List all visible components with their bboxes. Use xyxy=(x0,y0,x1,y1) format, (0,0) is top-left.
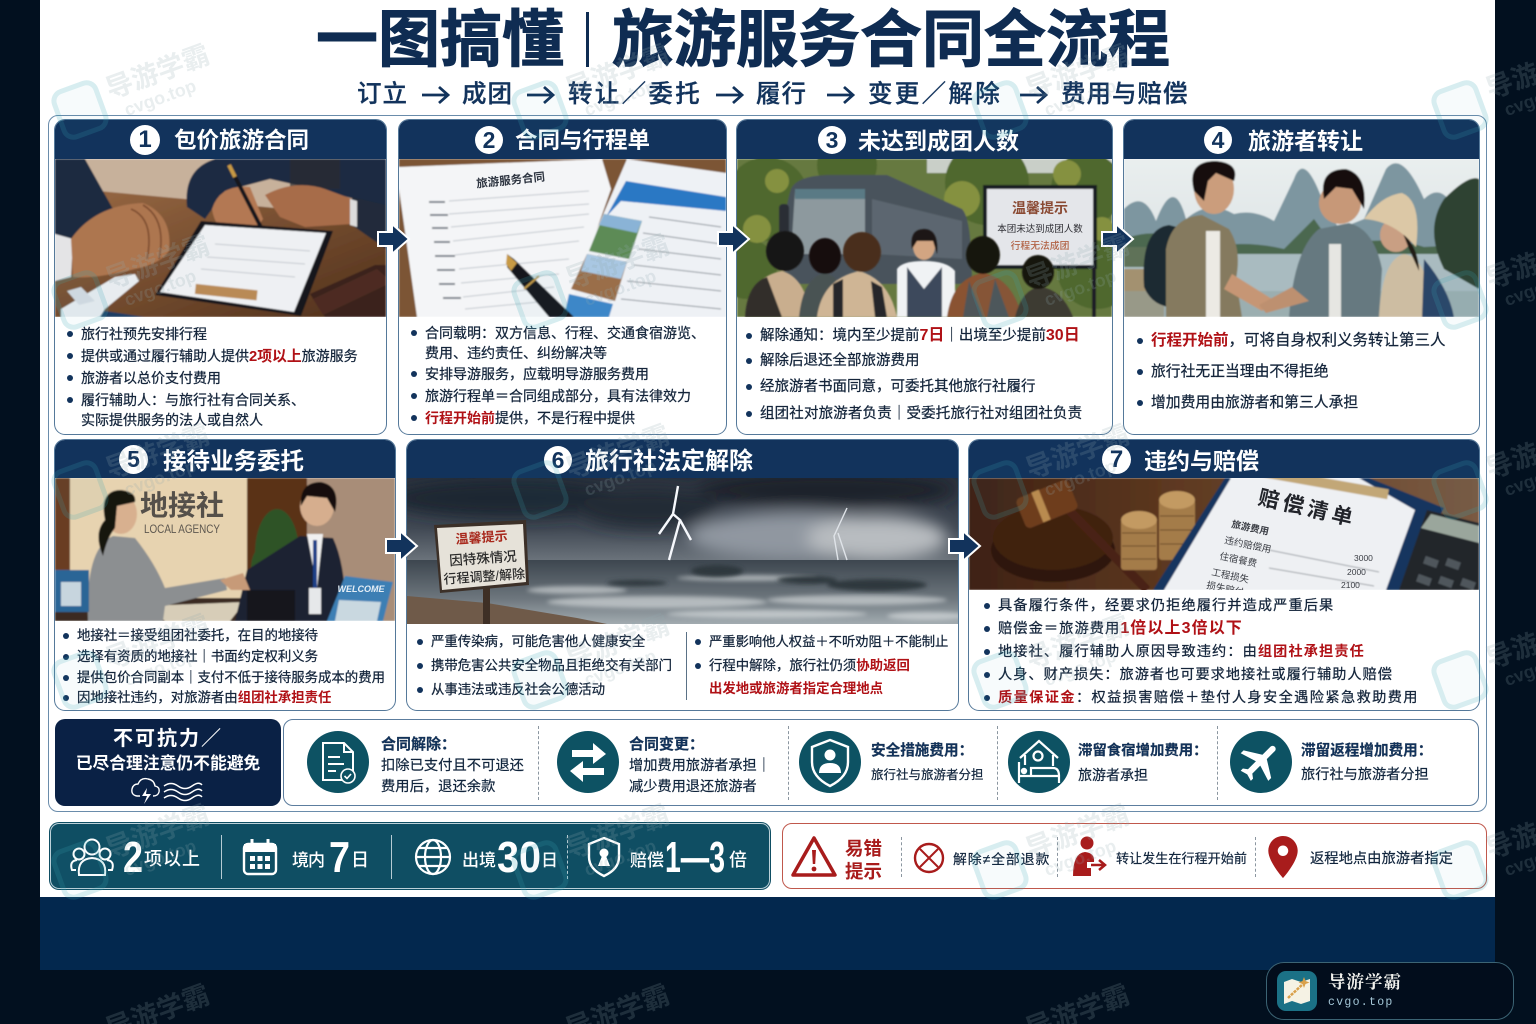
photo: gavel, coins and compensation list: 3000 xyxy=(1354,553,1373,563)
stranded return item: 旅行社与旅游者分担 xyxy=(1301,767,1429,783)
title: 旅游服务合同全流程 xyxy=(612,6,1170,75)
photo: gavel, coins and compensation list: 旅游费用 xyxy=(1230,518,1270,538)
photo: gavel, coins and compensation list: 2100 xyxy=(1341,580,1360,590)
common mistakes box: 解除≠全部退款 xyxy=(953,851,1050,867)
watermark layer: cvgo.top xyxy=(122,836,199,880)
watermark layer: cvgo.top xyxy=(122,646,199,690)
watermark layer: 导游学霸 xyxy=(1022,800,1134,865)
watermark layer: 导游学霸 xyxy=(1022,40,1134,105)
watermark layer: 导游学霸 xyxy=(102,40,214,105)
icon: location pin xyxy=(1268,836,1298,878)
stat: outbound 30 days: 出境 xyxy=(462,851,496,870)
panel 7: breach and compensation: 违约与赔偿 xyxy=(1144,448,1259,474)
photo: guide notifying group by a bus xyxy=(737,159,1112,317)
photo: gavel, coins and compensation list: 赔偿清单 xyxy=(1256,486,1359,531)
watermark layer: cvgo.top xyxy=(582,646,659,690)
subtitle: process flow: 变更／解除 xyxy=(868,81,1002,108)
panel 2: contract and itinerary: 安排导游服务，应载明导游服务费用 xyxy=(425,366,649,382)
common mistakes box: 易错 xyxy=(845,838,882,859)
stat: compensation 1-3 times: 倍 xyxy=(729,850,747,870)
contract termination item xyxy=(307,731,524,795)
stat: outbound 30 days: 日 xyxy=(541,851,558,870)
panel 6: statutory termination by agency: 行程中解除，旅行社仍须协助返回 xyxy=(709,658,910,673)
photo: gavel, coins and compensation list: 违约赔偿用 xyxy=(1223,534,1272,556)
safety cost item: 安全措施费用： xyxy=(871,743,973,759)
brand badge: cvgo.top xyxy=(1328,996,1394,1009)
safety cost item: 旅行社与旅游者分担 xyxy=(871,768,984,782)
arrow: panel 1 to 2 xyxy=(377,226,410,252)
stat: compensation 1-3 times xyxy=(630,834,747,880)
panel 2: contract and itinerary xyxy=(399,120,726,434)
common mistakes box xyxy=(782,823,1487,889)
icon: calendar xyxy=(242,839,278,876)
arrow: panel 6 to 7 xyxy=(948,533,982,559)
force majeure box: 已尽合理注意仍不能避免 xyxy=(76,754,260,773)
subtitle: process flow: 订立 xyxy=(357,81,408,108)
photo: local agency reception handshake: 地接社 xyxy=(140,490,224,521)
stat: domestic 7 days xyxy=(292,834,369,880)
panel 7: breach and compensation: 7 xyxy=(1110,446,1123,473)
panel 1: package tour contract: 旅游者以总价支付费用 xyxy=(81,370,221,386)
watermark layer: 导游学霸 xyxy=(1022,610,1134,675)
panel 3: minimum group size not met xyxy=(737,120,1112,434)
panel 7: breach and compensation: 地接社、履行辅助人原因导致违约：由组团社承担责任 xyxy=(998,644,1365,660)
panel 2: contract and itinerary: 旅游行程单＝合同组成部分，具有法律效力 xyxy=(425,388,691,404)
photo: guide notifying group by a bus: 本团未达到成团人数 xyxy=(997,223,1083,235)
contract change item xyxy=(557,731,771,795)
watermark layer: cvgo.top xyxy=(582,456,659,500)
force majeure box xyxy=(55,719,281,806)
panel 6: statutory termination by agency: 6 xyxy=(552,447,564,473)
photo: gavel, coins and compensation list xyxy=(969,478,1479,590)
watermark layer: cvgo.top xyxy=(122,456,199,500)
panel 5: local agency entrustment: 提供包价合同副本｜支付不低于接待服务成本的费用 xyxy=(77,670,385,685)
contract change item: 合同变更： xyxy=(629,736,704,753)
subtitle: process flow: 费用与赔偿 xyxy=(1061,81,1188,108)
icon: storm and waves xyxy=(131,778,202,804)
stat: outbound 30 days xyxy=(462,834,558,880)
panel 4: traveler transfer: 旅游者转让 xyxy=(1248,128,1363,154)
photo: gavel, coins and compensation list: 工程损失 xyxy=(1210,566,1251,586)
photo: gavel, coins and compensation list: 2000 xyxy=(1347,567,1366,577)
panel 4: traveler transfer xyxy=(1124,120,1479,434)
panel 7: breach and compensation: 人身、财产损失：旅游者也可要求地接社或履行辅助人赔偿 xyxy=(998,667,1393,683)
panel 2: contract and itinerary: 合同与行程单 xyxy=(515,128,650,153)
watermark layer: 导游学霸 xyxy=(562,230,674,295)
arrow: panel 5 to 6 xyxy=(385,533,418,559)
photo: local agency reception handshake: WELCOME xyxy=(338,584,385,594)
stranded lodging item: 滞留食宿增加费用： xyxy=(1078,743,1208,759)
photo: gavel, coins and compensation list: 住宿餐费 xyxy=(1218,550,1258,570)
stranded lodging item xyxy=(1008,731,1208,793)
panel 1: package tour contract: 实际提供服务的法人或自然人 xyxy=(81,412,263,428)
panel 1: package tour contract: 1 xyxy=(138,126,152,153)
panel 7: breach and compensation: 质量保证金：权益损害赔偿＋垫付人身安全遇险紧急救助费用 xyxy=(998,690,1419,706)
panel 7: breach and compensation xyxy=(969,440,1479,710)
watermark layer: 导游学霸 xyxy=(102,800,214,865)
panel 7: breach and compensation: 具备履行条件，经要求仍拒绝履行并造成严重后果 xyxy=(998,598,1334,614)
icon: exchange arrows xyxy=(557,731,619,793)
panel 1: package tour contract: 提供或通过履行辅助人提供2项以上旅游服务 xyxy=(81,348,358,365)
watermark layer: cvgo.top xyxy=(582,76,659,120)
icon: shield xyxy=(588,836,620,878)
stat: compensation 1-3 times: 赔偿 xyxy=(630,851,664,870)
stranded lodging item: 旅游者承担 xyxy=(1078,767,1148,783)
panel 1: package tour contract xyxy=(55,120,386,434)
panel 2: contract and itinerary: 费用、违约责任、纠纷解决等 xyxy=(425,345,607,361)
photo: signing a contract xyxy=(55,159,386,317)
arrow: panel 2 to 3 xyxy=(717,226,750,252)
subtitle: process flow: 转让／委托 xyxy=(568,81,702,108)
panel 4: traveler transfer: 增加费用由旅游者和第三人承担 xyxy=(1151,395,1358,411)
watermark layer: 导游学霸 xyxy=(562,610,674,675)
watermark layer: 导游学霸 xyxy=(562,800,674,865)
stat: domestic 7 days: 日 xyxy=(351,850,369,870)
photo: travelers shaking hands before karst hills xyxy=(1124,159,1479,317)
force majeure box: 不可抗力／ xyxy=(113,728,223,750)
panel 1: package tour contract: 旅行社预先安排行程 xyxy=(81,326,207,342)
common mistakes box: 提示 xyxy=(845,861,882,882)
icon: document xyxy=(307,731,369,793)
photo: storm over the sea with a warning sign: 行程调整/解除 xyxy=(443,566,526,587)
panel 5: local agency entrustment: 因地接社违约，对旅游者由组团社承担责任 xyxy=(77,690,331,705)
watermark layer: cvgo.top xyxy=(122,76,199,120)
stranded return item: 滞留返程增加费用： xyxy=(1301,743,1432,759)
panel 3: minimum group size not met: 未达到成团人数 xyxy=(858,128,1019,154)
photo: storm over the sea with a warning sign xyxy=(407,478,958,624)
panel 6: statutory termination by agency: 严重传染病，可能危害他人健康安全 xyxy=(431,634,645,649)
icon: warning triangle xyxy=(791,836,837,877)
panel 1: package tour contract: 包价旅游合同 xyxy=(174,128,309,153)
watermark layer: 导游学霸 xyxy=(102,420,214,485)
panel 2: contract and itinerary: 合同载明：双方信息、行程、交通食宿游览、 xyxy=(425,325,705,341)
photo: storm over the sea with a warning sign: 因特殊情况 xyxy=(449,549,518,568)
stranded return item xyxy=(1230,731,1432,793)
key numbers bar xyxy=(50,823,770,889)
panel 1: package tour contract: 履行辅助人：与旅行社有合同关系、 xyxy=(81,392,305,408)
panel 5: local agency entrustment xyxy=(55,440,395,710)
contract termination item: 费用后，退还余款 xyxy=(381,779,495,795)
contract termination item: 合同解除： xyxy=(381,736,456,753)
title xyxy=(316,6,1170,75)
common mistakes box: 转让发生在行程开始前 xyxy=(1116,851,1247,866)
panel 4: traveler transfer: 行程开始前，可将自身权利义务转让第三人 xyxy=(1151,332,1446,349)
contract change item: 增加费用旅游者承担｜ xyxy=(629,758,771,774)
contract change item: 减少费用退还旅游者 xyxy=(629,779,757,795)
panel 6: statutory termination by agency xyxy=(407,440,958,710)
icon: shield with person xyxy=(799,731,861,793)
panel 4: traveler transfer: 4 xyxy=(1212,127,1224,153)
panel 3: minimum group size not met: 组团社对旅游者负责｜受委托旅行社对组团社负责 xyxy=(760,406,1082,422)
panel 6: statutory termination by agency: 携带危害公共安全物品且拒绝交有关部门 xyxy=(431,658,672,673)
brand badge: 导游学霸 xyxy=(1328,969,1402,994)
photo: contract and itinerary sheets xyxy=(399,159,726,317)
stat: 2 items or more: 项以上 xyxy=(144,849,200,869)
icon: person transfer xyxy=(1073,836,1107,876)
watermark layer: 导游学霸 xyxy=(102,230,214,295)
photo: guide notifying group by a bus: 行程无法成团 xyxy=(1011,239,1070,252)
brand badge xyxy=(1266,962,1514,1020)
watermark layer: 导游学霸 xyxy=(562,40,674,105)
photo: contract and itinerary sheets: 旅游服务合同 xyxy=(476,169,546,191)
watermark layer: cvgo.top xyxy=(582,266,659,310)
icon: airplane xyxy=(1230,731,1292,793)
outer frame xyxy=(48,115,1487,812)
watermark layer: cvgo.top xyxy=(1042,646,1119,690)
stat: 2 items or more xyxy=(123,834,200,880)
icon: map logo xyxy=(1277,971,1317,1011)
photo: storm over the sea with a warning sign: 温馨提示 xyxy=(455,528,508,547)
panel 3: minimum group size not met: 解除通知：境内至少提前7日｜出境至少提前30日 xyxy=(760,327,1080,344)
panel 5: local agency entrustment: 选择有资质的地接社｜书面约定权利义务 xyxy=(77,649,318,664)
panel 2: contract and itinerary: 2 xyxy=(483,127,495,153)
safety cost item xyxy=(799,731,984,793)
watermark layer: cvgo.top xyxy=(582,836,659,880)
common mistakes box: 返程地点由旅游者指定 xyxy=(1310,851,1453,867)
contract termination item: 扣除已支付且不可退还 xyxy=(381,758,524,774)
photo: local agency reception handshake xyxy=(55,478,395,621)
subtitle: process flow: 履行 xyxy=(756,81,807,108)
blue footer band xyxy=(40,897,1495,970)
watermark layer: cvgo.top xyxy=(122,266,199,310)
watermark layer: cvgo.top xyxy=(1042,836,1119,880)
cost allocation box xyxy=(283,719,1479,806)
watermark layer: cvgo.top xyxy=(1042,266,1119,310)
panel 3: minimum group size not met: 3 xyxy=(826,127,838,153)
watermark layer: 导游学霸 xyxy=(102,610,214,675)
icon: globe xyxy=(414,838,452,876)
panel 3: minimum group size not met: 经旅游者书面同意，可委托其他旅行社履行 xyxy=(760,379,1036,395)
stat: domestic 7 days: 境内 xyxy=(292,851,325,870)
watermark layer: 导游学霸 xyxy=(562,420,674,485)
title: 一图搞懂 xyxy=(316,6,564,75)
panel 6: statutory termination by agency: 从事违法或违反社会公德活动 xyxy=(431,682,605,697)
icon: cross circle xyxy=(914,842,944,874)
panel 4: traveler transfer: 旅行社无正当理由不得拒绝 xyxy=(1151,364,1329,380)
photo: local agency reception handshake: LOCAL AGENCY xyxy=(144,522,220,536)
panel 3: minimum group size not met: 解除后退还全部旅游费用 xyxy=(760,353,920,369)
subtitle: process flow xyxy=(357,80,1188,108)
watermark layer: 导游学霸 xyxy=(1022,420,1134,485)
icon: house with bed xyxy=(1008,731,1070,793)
panel 6: statutory termination by agency: 出发地或旅游者指定合理地点 xyxy=(709,681,883,696)
panel 5: local agency entrustment: 地接社＝接受组团社委托，在目的地接待 xyxy=(77,628,318,643)
icon: group of people xyxy=(70,838,114,876)
subtitle: process flow: 成团 xyxy=(462,81,513,108)
panel 2: contract and itinerary: 行程开始前提供，不是行程中提供 xyxy=(425,410,635,426)
watermark layer: cvgo.top xyxy=(1042,456,1119,500)
watermark layer: 导游学霸 xyxy=(1022,230,1134,295)
panel 5: local agency entrustment: 接待业务委托 xyxy=(163,448,304,474)
panel 5: local agency entrustment: 5 xyxy=(127,446,140,472)
panel 7: breach and compensation: 赔偿金＝旅游费用1倍以上3倍以下 xyxy=(998,620,1243,637)
watermark layer: cvgo.top xyxy=(1042,76,1119,120)
panel 6: statutory termination by agency: 严重影响他人权益＋不听劝阻＋不能制止 xyxy=(709,634,948,649)
photo: guide notifying group by a bus: 温馨提示 xyxy=(1012,200,1068,216)
arrow: panel 3 to 4 xyxy=(1101,226,1134,252)
panel 6: statutory termination by agency: 旅行社法定解除 xyxy=(585,448,753,475)
